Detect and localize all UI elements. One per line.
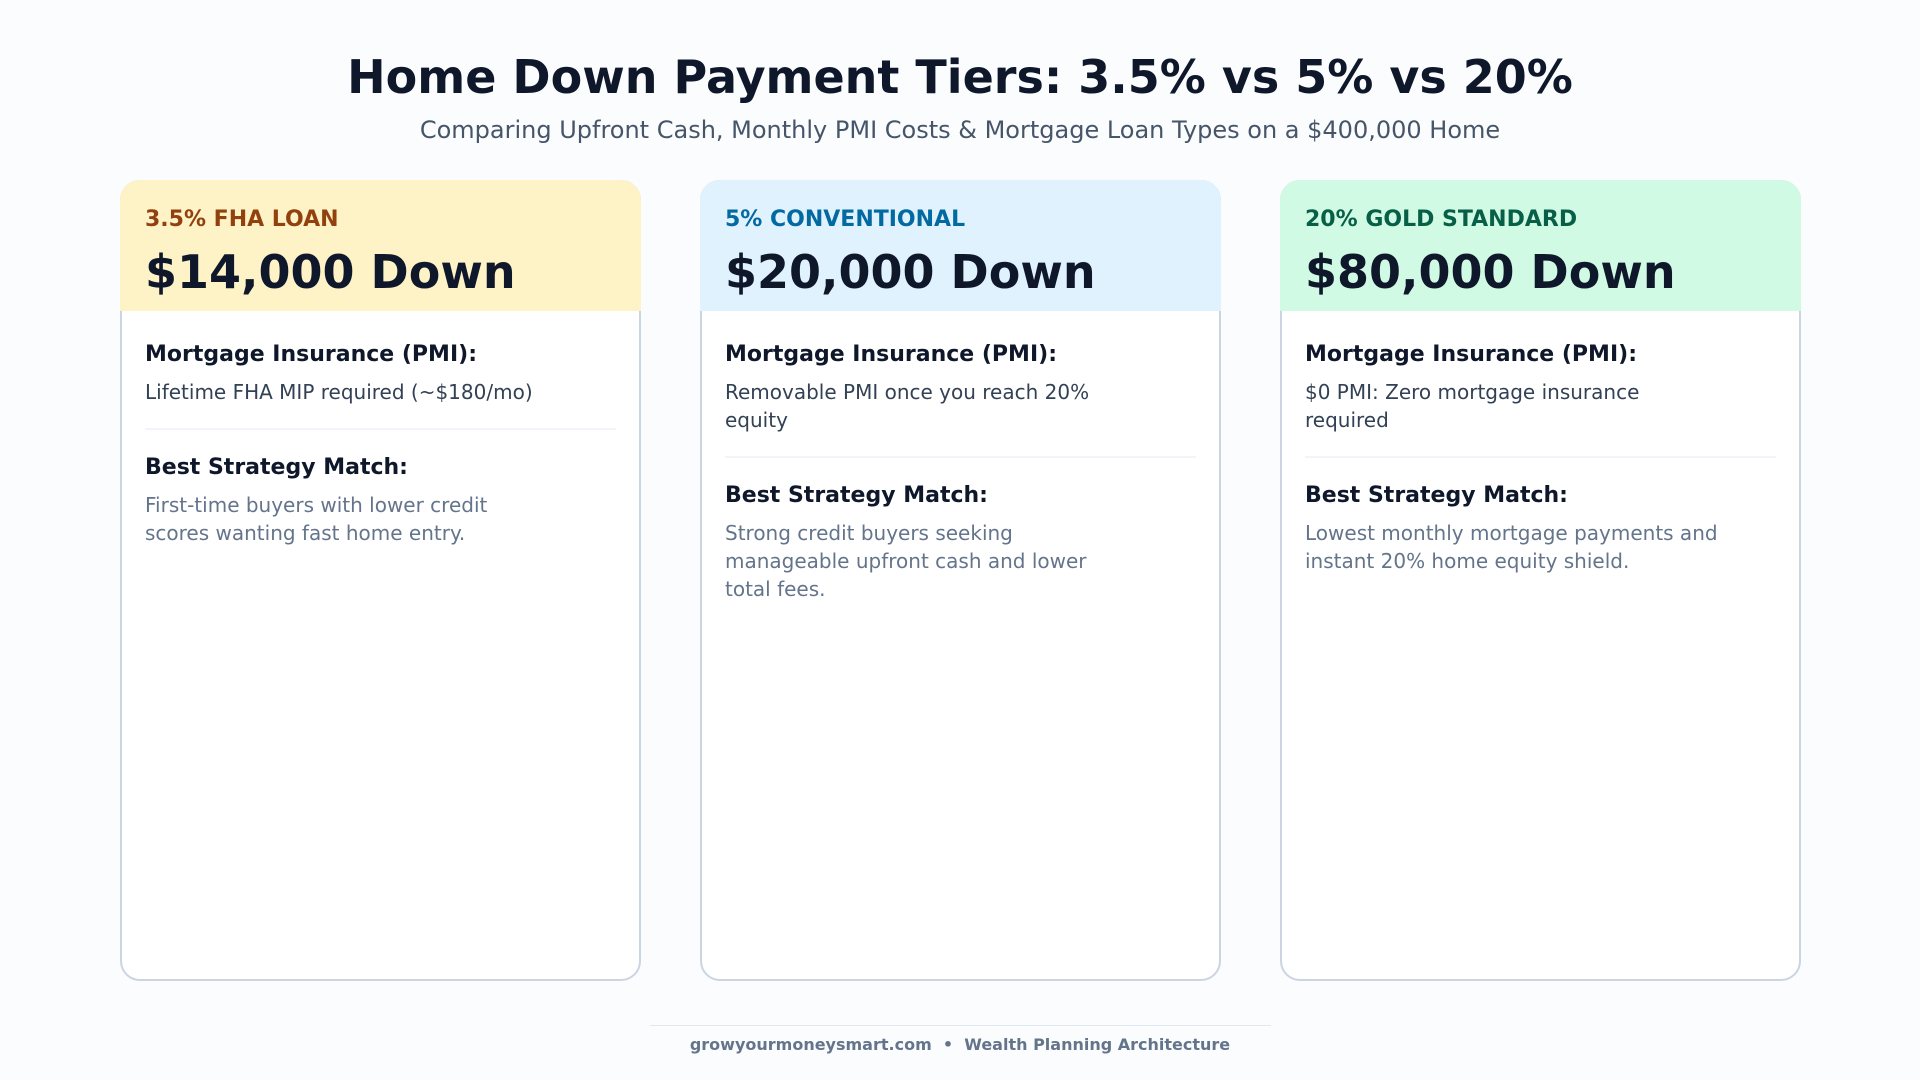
text: strategy detail (145, 493, 487, 545)
tier label: 20% GOLD STANDARD (1305, 207, 1577, 232)
subtitle: Comparing Upfront Cash, Monthly PMI Costs & Mortgage Loan Types on a $400,000 Home (420, 116, 1500, 144)
text: PMI detail (1305, 380, 1639, 432)
panel: 3.5% FHA loan (120, 180, 641, 981)
text: strategy detail: First-time buyers with lower credit (145, 493, 487, 517)
title: Home Down Payment Tiers: 3.5% vs 5% vs 20% (347, 50, 1573, 104)
text: strategy detail (725, 521, 1087, 601)
footer: growyourmoneysmart.com • Wealth Planning Architecture (690, 1035, 1230, 1054)
down payment amount: $80,000 Down (1305, 245, 1676, 299)
text: PMI detail: Removable PMI once you reach 20% (725, 380, 1089, 404)
heading: best strategy: Best Strategy Match: (145, 455, 408, 480)
tier label: 3.5% FHA LOAN (145, 207, 339, 232)
text: strategy detail: Strong credit buyers seeking (725, 521, 1013, 545)
panel header: conventional (700, 180, 1221, 311)
text: strategy detail: instant 20% home equity shield. (1305, 549, 1629, 573)
text: PMI detail: required (1305, 408, 1389, 432)
text: strategy detail: Lowest monthly mortgage payments and (1305, 521, 1718, 545)
heading: best strategy: Best Strategy Match: (725, 483, 988, 508)
tier label: 5% CONVENTIONAL (725, 207, 965, 232)
down payment amount: $14,000 Down (145, 245, 516, 299)
text: PMI detail: Lifetime FHA MIP required (~$180/mo) (145, 380, 533, 404)
text: strategy detail (1305, 521, 1718, 573)
panel: 20% gold standard (1280, 180, 1801, 981)
text: strategy detail: total fees. (725, 577, 826, 601)
text: strategy detail: manageable upfront cash and lower (725, 549, 1087, 573)
heading: best strategy: Best Strategy Match: (1305, 483, 1568, 508)
heading: mortgage insurance: Mortgage Insurance (PMI): (1305, 342, 1637, 367)
text: strategy detail: scores wanting fast home entry. (145, 521, 465, 545)
panel: 5% conventional (700, 180, 1221, 981)
text: PMI detail: $0 PMI: Zero mortgage insurance (1305, 380, 1639, 404)
panel header: FHA (120, 180, 641, 311)
panel header: gold standard (1280, 180, 1801, 311)
down payment amount: $20,000 Down (725, 245, 1096, 299)
heading: mortgage insurance: Mortgage Insurance (PMI): (725, 342, 1057, 367)
text: PMI detail: equity (725, 408, 788, 432)
heading: mortgage insurance: Mortgage Insurance (PMI): (145, 342, 477, 367)
text: PMI detail (725, 380, 1089, 432)
